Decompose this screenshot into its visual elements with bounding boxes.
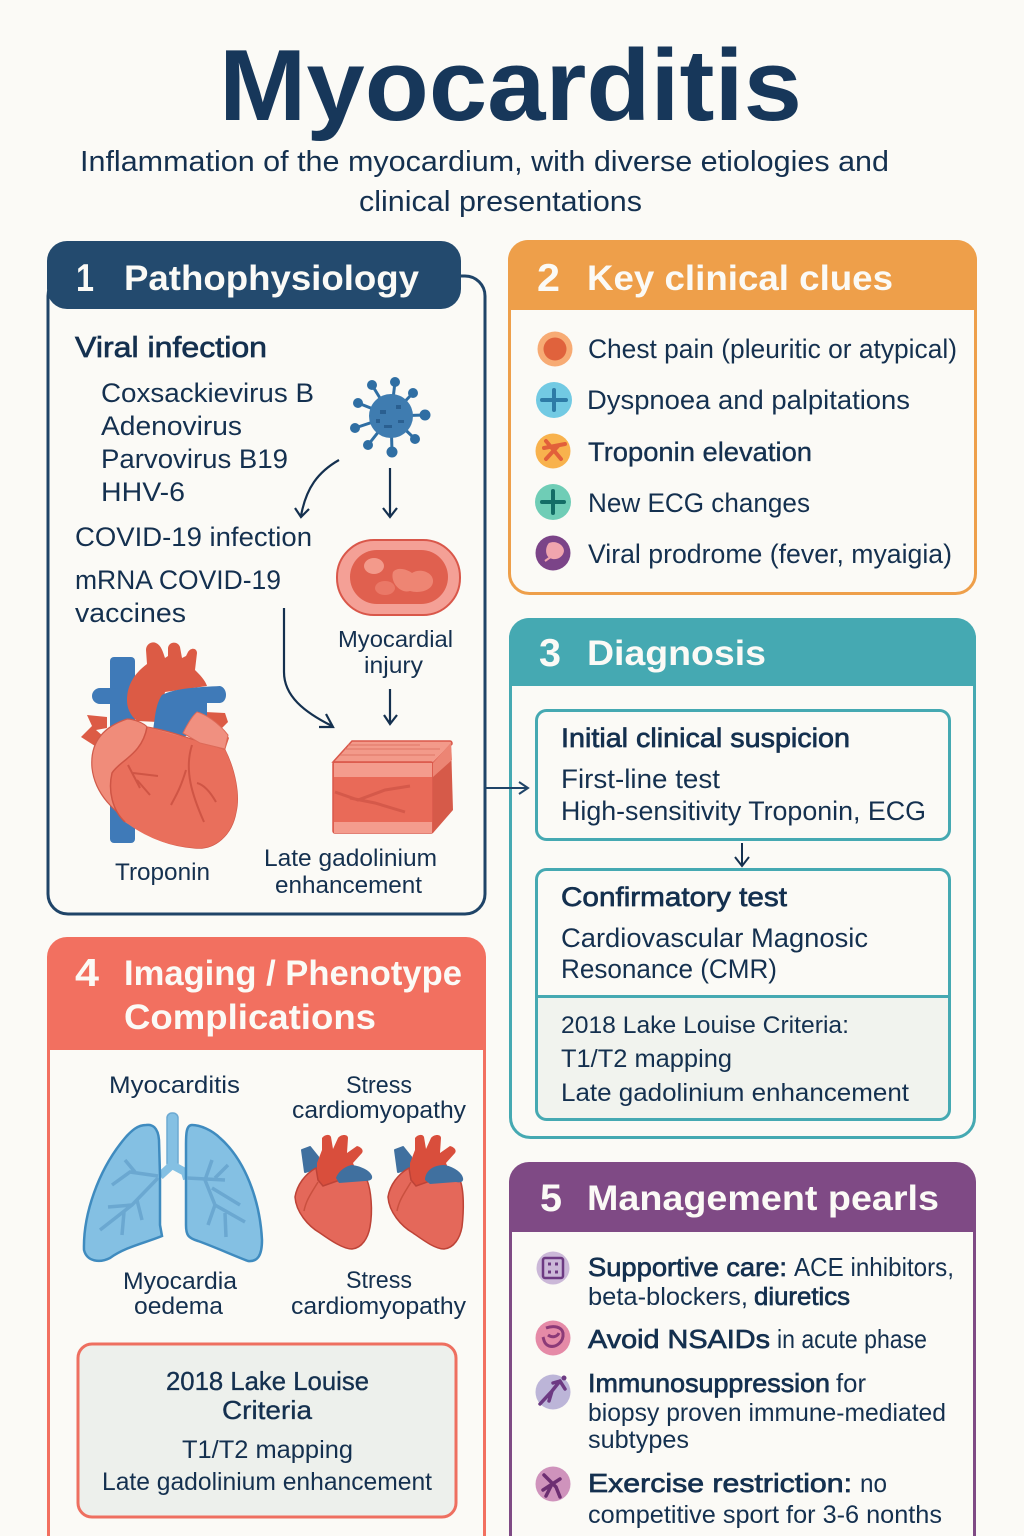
pearl: avoid nsaids: Avoid NSAIDs: [588, 1324, 770, 1354]
box: confirmatory test: 2018 Lake Louise Criteria:: [561, 1012, 849, 1039]
heading: pathophysiology: 1: [76, 257, 94, 300]
panel: imaging / phenotype: [47, 937, 486, 1536]
pearl: immunosuppression: for: [836, 1368, 866, 1398]
box: initial clinical suspicion: First-line test: [561, 764, 721, 794]
text: viral causes: COVID-19 infection: [75, 522, 312, 552]
panel: key clinical clues: [508, 240, 977, 594]
pearl: avoid nsaids: [536, 1320, 927, 1356]
text: viral causes: Adenovirus: [101, 411, 242, 441]
heading: key clinical clues: Key clinical clues: [587, 259, 893, 298]
pearl: immunosuppression: biopsy proven immune-mediated: [588, 1399, 946, 1427]
heading: management pearls: 5: [540, 1177, 562, 1220]
icon: heart: [81, 642, 237, 848]
icon: virus: [350, 377, 430, 458]
clue: ecg changes: [535, 484, 810, 520]
box: confirmatory test: Late gadolinium enhancement: [561, 1079, 909, 1107]
label: myocardial injury: injury: [364, 652, 424, 678]
text: viral causes: [75, 332, 314, 628]
box: initial clinical suspicion: Initial clinical suspicion: [561, 723, 850, 753]
icon: tissue block: [333, 741, 453, 833]
pearl: exercise restriction: [536, 1466, 942, 1529]
callout: lake louise criteria: T1/T2 mapping: [182, 1436, 353, 1464]
label: stress cardiomyopathy bottom: cardiomyopathy: [291, 1293, 466, 1320]
label: myocardia oedema: Myocardia: [123, 1268, 238, 1295]
label: troponin: Troponin: [115, 859, 210, 886]
arrow: virus to myocardial injury: [383, 468, 397, 517]
clue: troponin: [536, 434, 812, 468]
heading: diagnosis: [509, 618, 976, 686]
clue: chest pain: Chest pain (pleuritic or atypical): [588, 334, 957, 364]
clue: ecg changes: New ECG changes: [588, 488, 810, 518]
pearl: supportive care: beta-blockers,: [588, 1283, 748, 1311]
icon: myocardial tissue: [337, 540, 460, 615]
pearl: supportive care: [536, 1252, 954, 1311]
arrow: injury to enhancement: [384, 689, 397, 724]
heading: management pearls: Management pearls: [587, 1179, 939, 1218]
pearl: immunosuppression: subtypes: [588, 1426, 689, 1454]
callout: lake louise criteria: Late gadolinium enhancement: [102, 1468, 432, 1496]
box: initial clinical suspicion: [536, 710, 950, 840]
callout: lake louise criteria: Criteria: [222, 1395, 313, 1425]
pearl: exercise restriction: competitive sport for 3-6 nonths: [588, 1501, 942, 1529]
text: viral causes: HHV-6: [101, 477, 185, 507]
label: stress cardiomyopathy top: cardiomyopathy: [292, 1097, 466, 1124]
heading: pathophysiology: Pathophysiology: [124, 259, 420, 298]
subtitle: Inflammation of the myocardium, with diverse etiologies and: [80, 146, 889, 178]
clue: viral prodrome: Viral prodrome (fever, myaigia): [588, 539, 952, 569]
subtitle: clinical presentations: [359, 186, 642, 218]
label: myocarditis: Myocarditis: [109, 1072, 240, 1099]
callout: lake louise criteria: 2018 Lake Louise: [166, 1366, 369, 1396]
box: confirmatory test: [536, 870, 950, 1120]
clue: troponin: Troponin elevation: [588, 437, 812, 467]
pearl: immunosuppression: [536, 1368, 946, 1454]
label: stress cardiomyopathy bottom: [291, 1267, 466, 1320]
panel: diagnosis: [509, 618, 976, 1138]
arrow: vaccines to enhancement: [284, 608, 333, 727]
heading: imaging / phenotype: 4: [75, 952, 99, 995]
heading: key clinical clues: 2: [537, 257, 560, 300]
heading: imaging / phenotype: [47, 937, 486, 1050]
pearl: supportive care: Supportive care:: [588, 1252, 787, 1282]
label: myocardia oedema: [123, 1268, 238, 1320]
pearl: exercise restriction: Exercise restriction:: [588, 1468, 852, 1498]
label: myocardia oedema: oedema: [134, 1293, 224, 1320]
pearl: immunosuppression: Immunosuppression: [588, 1368, 830, 1398]
text: viral causes: Parvovirus B19: [101, 444, 288, 474]
heading: diagnosis: 3: [539, 632, 561, 675]
box: confirmatory test: Resonance (CMR): [561, 954, 777, 984]
label: late gadolinium enhancement: [264, 845, 437, 899]
text: viral causes: Coxsackievirus B: [101, 378, 314, 408]
heading: pathophysiology: [47, 241, 461, 309]
callout: lake louise criteria: [78, 1344, 456, 1517]
label: myocardial injury: Myocardial: [338, 626, 453, 652]
heading: key clinical clues: [508, 240, 977, 310]
text: viral causes: mRNA COVID-19: [75, 565, 281, 595]
pearl: supportive care: ACE inhibitors,: [794, 1252, 954, 1282]
clue: dyspnoea: Dyspnoea and palpitations: [587, 385, 910, 415]
box: confirmatory test: Confirmatory test: [561, 882, 788, 912]
text: viral causes: vaccines: [75, 598, 186, 628]
label: stress cardiomyopathy top: [292, 1072, 466, 1124]
text: viral causes: Viral infection: [75, 332, 267, 364]
icon: lungs: [84, 1113, 262, 1261]
icon: stress hearts: [295, 1135, 463, 1249]
label: late gadolinium enhancement: enhancement: [275, 872, 422, 899]
arrow: pathophysiology to diagnosis: [486, 782, 528, 794]
arrow: suspicion to confirmatory: [735, 843, 749, 866]
subtitle: [80, 146, 889, 218]
title: Myocarditis: [219, 30, 802, 142]
pearl: supportive care: diuretics: [754, 1283, 850, 1311]
heading: imaging / phenotype: Imaging / Phenotype: [124, 954, 462, 993]
panel: pathophysiology: [47, 241, 485, 914]
heading: imaging / phenotype: Complications: [124, 998, 376, 1037]
box: confirmatory test: T1/T2 mapping: [561, 1045, 732, 1073]
heading: management pearls: [509, 1162, 976, 1232]
heading: diagnosis: Diagnosis: [587, 634, 766, 673]
panel: management pearls: [509, 1162, 976, 1536]
label: late gadolinium enhancement: Late gadolinium: [264, 845, 437, 872]
label: stress cardiomyopathy bottom: Stress: [346, 1267, 412, 1294]
label: stress cardiomyopathy top: Stress: [346, 1072, 412, 1099]
box: initial clinical suspicion: High-sensitivity Troponin, ECG: [561, 796, 926, 826]
label: myocardial injury: [338, 626, 453, 678]
box: confirmatory test: Cardiovascular Magnosic: [561, 923, 868, 953]
pearl: avoid nsaids: in acute phase: [777, 1324, 927, 1354]
pearl: exercise restriction: no: [860, 1468, 887, 1498]
arrow: virus to covid: [295, 460, 339, 517]
